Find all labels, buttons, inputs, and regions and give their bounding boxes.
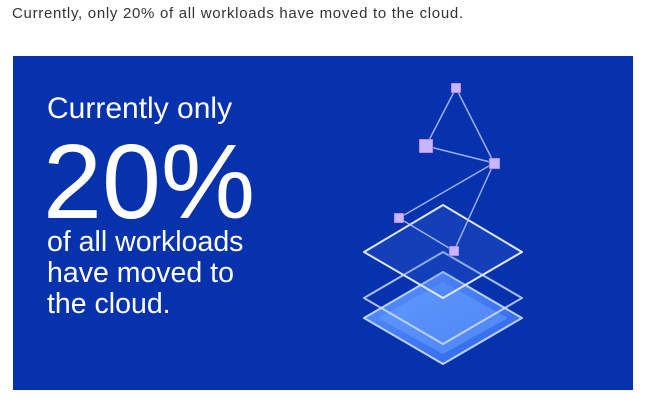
heading: currently only: Currently only <box>47 92 232 125</box>
panel: main <box>13 56 633 390</box>
big stat: 20%: 20% <box>43 123 255 241</box>
text block: description: the cloud. <box>47 288 171 320</box>
nodes <box>394 83 500 256</box>
base layer <box>364 272 522 364</box>
text block: description: have moved to <box>47 257 234 289</box>
caption: Currently, only 20% of all workloads have moved to the cloud. <box>12 5 464 22</box>
illustration: cloud network <box>363 82 523 365</box>
text block: description: of all workloads <box>47 226 243 258</box>
text block: description <box>47 226 243 320</box>
network lines <box>399 88 494 251</box>
